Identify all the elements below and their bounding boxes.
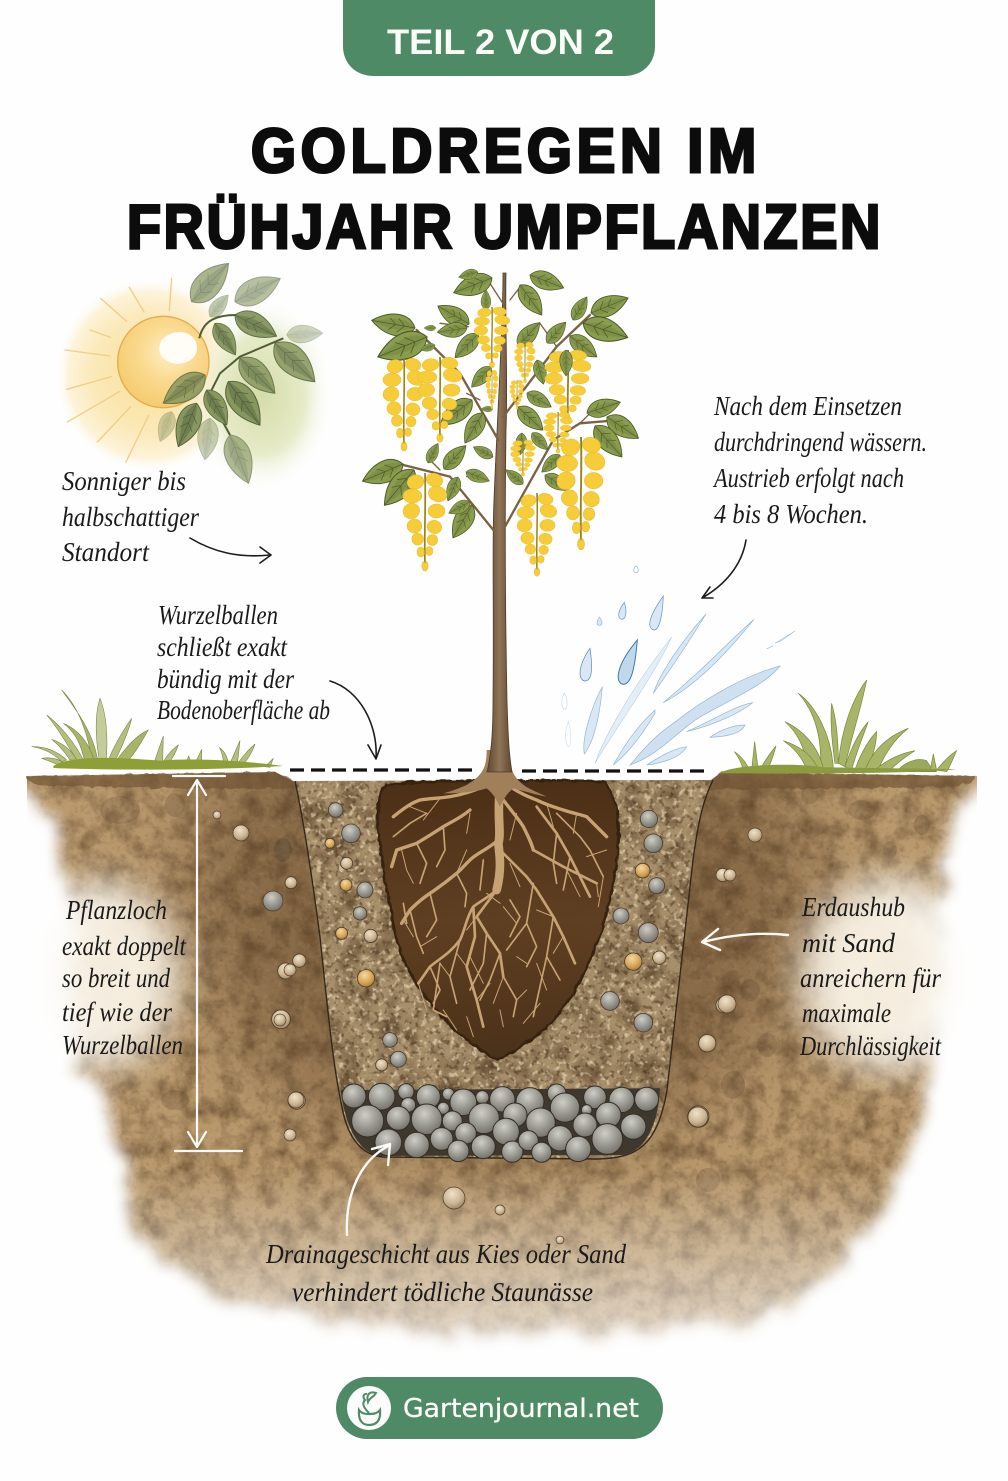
pill: part label: TEIL 2 VON 2 [387, 23, 614, 62]
text: root ball flush: bündig mit der [157, 664, 294, 694]
tree: leaf over flowers [560, 350, 572, 376]
text: pit size: exakt doppelt [62, 931, 187, 961]
text: excavated soil [799, 892, 942, 1061]
root ball [377, 750, 619, 1060]
text: watering: 4 bis 8 Wochen. [714, 499, 868, 529]
text: excavated soil: Durchlässigkeit [799, 1031, 942, 1061]
drainage gravel layer [341, 1083, 660, 1162]
grass: right [720, 680, 957, 773]
text: watering: durchdringend wässern. [714, 427, 927, 457]
title: FRÜHJAHR UMPFLANZEN [127, 193, 883, 262]
footer brand pill [336, 1377, 663, 1439]
text: pit size: Pflanzloch [65, 895, 167, 925]
text: drainage: verhindert tödliche Staunässe [292, 1277, 593, 1307]
pebbles in fill and surrounding soil [264, 803, 732, 1127]
tree: leaves [358, 267, 644, 543]
text: location: Sonniger bis [62, 466, 186, 496]
title [127, 117, 883, 262]
text: location: Standort [62, 537, 150, 567]
tree: branches [403, 283, 620, 530]
text: location [62, 466, 199, 567]
arrow: excavated soil [702, 929, 788, 950]
text: pit size: Wurzelballen [62, 1030, 183, 1060]
footer brand pill: Gartenjournal.net [403, 1394, 639, 1424]
trunk flare into roots [443, 750, 547, 807]
text: pit size: tief wie der [62, 997, 172, 1027]
roots [392, 787, 607, 1037]
text: root ball flush: Bodenoberfläche ab [157, 695, 330, 725]
arrow: location [190, 538, 271, 563]
text: drainage: Drainageschicht aus Kies oder Sand [265, 1239, 626, 1269]
text: root ball flush [157, 600, 330, 725]
text: location: halbschattiger [62, 502, 199, 532]
grass: left [32, 690, 283, 770]
text: pit size: so breit und [62, 963, 170, 993]
text: excavated soil: Erdaushub [801, 892, 905, 922]
planting pit with sand and gravel fill [294, 780, 714, 1160]
illustration: sun and leaves [54, 254, 334, 493]
pill: part label [343, 0, 655, 76]
tree: yellow flower clusters [380, 306, 608, 576]
text: excavated soil: mit Sand [802, 928, 895, 958]
text: excavated soil: maximale [802, 998, 891, 1028]
text: watering: Austrieb erfolgt nach [712, 463, 904, 493]
arrow: drainage [347, 1144, 390, 1235]
text: watering: Nach dem Einsetzen [713, 391, 902, 421]
text: root ball flush: schließt exakt [157, 632, 288, 662]
text: drainage [265, 1239, 626, 1307]
text: pit size [62, 895, 187, 1060]
arrow: root ball flush [330, 681, 381, 759]
icon: pot with sprout [347, 1386, 391, 1430]
dashed soil-level line [290, 770, 706, 771]
text: root ball flush: Wurzelballen [158, 600, 278, 630]
arrow: watering [702, 540, 746, 598]
water splash [562, 566, 795, 765]
pebbles in outer soil [213, 811, 762, 1244]
text: excavated soil: anreichern für [800, 963, 941, 993]
tree: trunk [487, 273, 512, 772]
text: watering [712, 391, 927, 529]
title: GOLDREGEN IM [251, 117, 761, 186]
soil cross-section [0, 630, 1008, 1380]
dimension arrow: pit depth [173, 776, 242, 1151]
